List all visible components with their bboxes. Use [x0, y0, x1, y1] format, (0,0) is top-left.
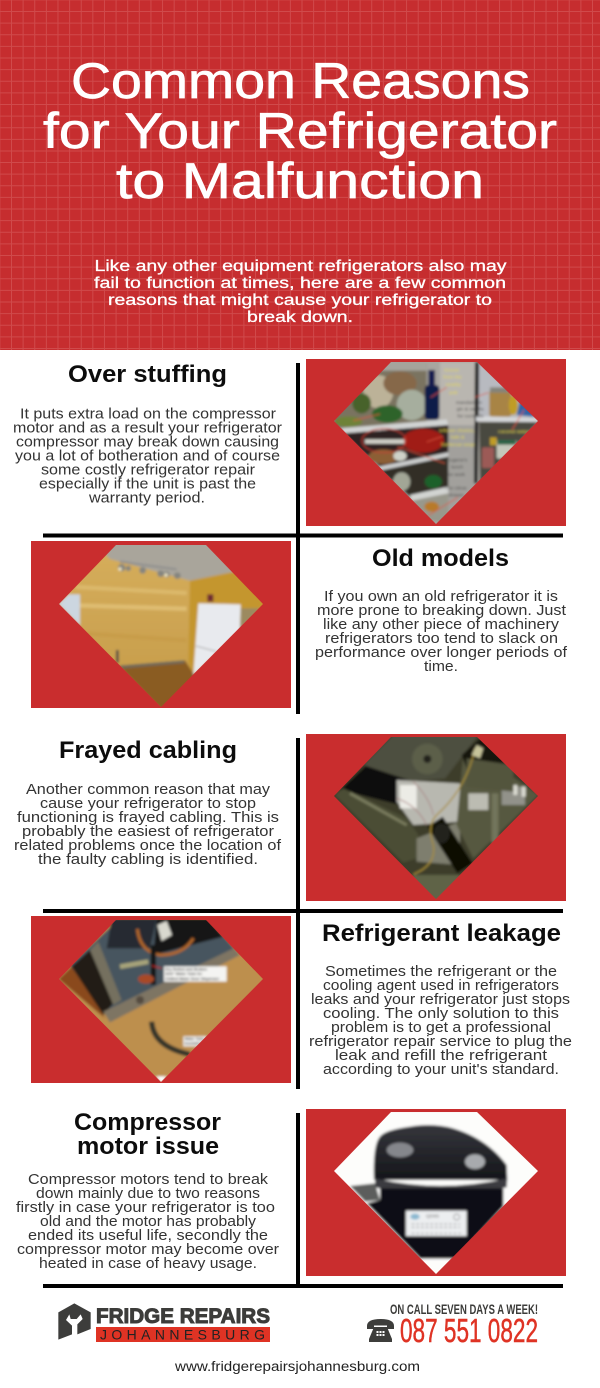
- section 3 body text: probably the easiest of refrigerator: [22, 824, 274, 840]
- section 5 body text: compressor motor may become over: [17, 1242, 279, 1258]
- section 2 heading: Old models: Old models: [372, 545, 509, 572]
- intro text: Like any other equipment refrigerators also may: [94, 258, 507, 275]
- photo panel: overstuffed fridge interior: kale &: [451, 435, 465, 441]
- photo panel: frayed wires: [306, 734, 566, 902]
- section 1 body text: you a lot of botheration and of course: [15, 449, 280, 465]
- section 5 body text: down mainly due to two reasons: [36, 1186, 260, 1202]
- section 5 body text: [16, 1172, 279, 1272]
- icon: house with wrench: [58, 1303, 91, 1340]
- photo panel: compressor motor: QD65: [426, 1213, 439, 1219]
- photo panel: leaking water tube: Water Tube: [185, 1037, 204, 1041]
- photo panel: overstuffed fridge interior: [306, 359, 566, 527]
- title: to Malfunction: [116, 153, 484, 209]
- photo panel: overstuffed fridge interior: gin & vanilla: [457, 407, 484, 413]
- title: for Your Refrigerator: [43, 103, 557, 159]
- section 2 body text: refrigerators too tend to slack on: [325, 631, 558, 647]
- intro text: reasons that might cause your refrigerator to: [108, 292, 492, 309]
- section 3 body text: functioning is frayed cabling. This is: [17, 810, 279, 826]
- section 1 body text: [13, 407, 282, 507]
- photo panel: compressor motor: [306, 1109, 566, 1277]
- section 1 body text: especially if the unit is past the: [39, 477, 256, 493]
- section 5 body text: old and the motor has probably: [40, 1214, 257, 1230]
- section 2 body text: more prone to breaking down. Just: [317, 603, 566, 619]
- logo: Fridge Repairs Johannesburg: FRIDGE REPAIRS: [96, 1305, 270, 1328]
- photo panel: leaking water tube: Chilled Water Door Dispenser: [165, 977, 220, 981]
- section 2 body text: time.: [424, 659, 458, 675]
- photo panel: overstuffed fridge interior: mandarin in: [456, 400, 482, 406]
- section 3 heading: Frayed cabling: Frayed cabling: [59, 737, 237, 764]
- section 3 body text: cause your refrigerator to stop: [40, 796, 256, 812]
- section 4 body text: cooling agent used in refrigerators: [323, 978, 559, 994]
- section 5 heading: Compressor motor issue: [74, 1109, 221, 1160]
- section 2 body text: [315, 589, 568, 675]
- photo panel: leaking water tube: Dry Rotted and Broken: [165, 967, 208, 971]
- section 4 body text: refrigerator repair service to plug the: [309, 1034, 572, 1050]
- section 4 body text: [309, 964, 572, 1078]
- photo panel: leaking water tube: Insulation: [185, 1041, 202, 1045]
- section 4 body text: problem is to get a professional: [331, 1020, 551, 1036]
- photo panel: overstuffed fridge interior: nearby: [446, 382, 461, 388]
- contact phone block: ON CALL SEVEN DAYS A WEEK!: [390, 1302, 538, 1317]
- section 1 body text: It puts extra load on the compressor: [20, 407, 276, 423]
- section 5 body text: firstly in case your refrigerator is too: [16, 1200, 275, 1216]
- logo: Fridge Repairs Johannesburg: [58, 1303, 270, 1342]
- website url: www.fridgerepairsjohannesburg.com: [174, 1359, 420, 1374]
- intro text: fail to function at times, here are a few common: [94, 275, 506, 292]
- icon: telephone: [367, 1319, 394, 1342]
- section 3 body text: the faulty cabling is identified.: [38, 852, 258, 868]
- section 4 heading: Refrigerant leakage: Refrigerant leakage: [322, 920, 561, 947]
- section 4 body text: leaks and your refrigerator just stops: [311, 992, 570, 1008]
- section 5 body text: Compressor motors tend to break: [28, 1172, 269, 1188]
- intro text: break down.: [247, 309, 353, 326]
- section 1 heading: Over stuffing: Over stuffing: [68, 361, 227, 388]
- title: Common Reasons: [71, 53, 530, 109]
- intro text: [94, 258, 507, 326]
- section 1 body text: compressor may break down causing: [16, 435, 279, 451]
- section 4 body text: according to your unit's standard.: [323, 1062, 559, 1078]
- photo panel: overstuffed fridge interior: barbecue soup: [441, 442, 475, 448]
- section 1 body text: warranty period.: [88, 491, 205, 507]
- photo panel: overstuffed fridge interior: drawer: [449, 493, 464, 499]
- photo panel: overstuffed fridge interior: for cocktails: [457, 413, 484, 419]
- section 4 body text: cooling. The only solution to this: [323, 1006, 559, 1022]
- section 3 body text: related problems once the location of: [14, 838, 282, 854]
- section 1 body text: motor and as a result your refrigerator: [13, 421, 282, 437]
- title: [43, 53, 557, 209]
- photo panel: leaking water tube: [31, 915, 291, 1085]
- section 5 body text: heated in case of heavy usage.: [39, 1256, 257, 1272]
- photo panel: overstuffed fridge interior: coconut water: [498, 429, 529, 435]
- header background panel: [0, 0, 600, 350]
- section 4 body text: Sometimes the refrigerant or the: [325, 964, 557, 980]
- logo: Fridge Repairs Johannesburg: JOHANNESBURG: [100, 1326, 265, 1342]
- section 4 body text: leak and refill the refrigerant: [335, 1048, 547, 1064]
- section 1 body text: some costly refrigerator repair: [41, 463, 255, 479]
- photo panel: overstuffed fridge interior: for work: [447, 472, 466, 478]
- photo panel: overstuffed fridge interior: lunch: [451, 464, 463, 470]
- photo panel: overstuffed fridge interior: Eugene's: [447, 457, 468, 463]
- section 3 body text: [14, 782, 282, 868]
- photo panel: overstuffed fridge interior: Grocer: [444, 367, 460, 373]
- photo panel: overstuffed fridge interior: pub: [449, 390, 458, 396]
- section 2 body text: If you own an old refrigerator it is: [324, 589, 558, 605]
- photo panel: overstuffed fridge interior: from the: [443, 375, 462, 381]
- section 2 body text: like any other piece of machinery: [323, 617, 560, 633]
- section 3 body text: Another common reason that may: [26, 782, 271, 798]
- section 5 heading: Compressor motor issue: Compressor: [74, 1109, 221, 1136]
- section 2 body text: performance over longer periods of: [315, 645, 568, 661]
- section 5 heading: Compressor motor issue: motor issue: [77, 1133, 219, 1160]
- contact phone block: 087 551 0822: [400, 1312, 538, 1349]
- contact phone block: [367, 1302, 538, 1349]
- photo panel: old fridge in wooden room: [31, 541, 291, 712]
- photo panel: overstuffed fridge interior: The citrus: [445, 485, 467, 491]
- section 5 body text: ended its useful life, secondly the: [28, 1228, 268, 1244]
- photo panel: leaking water tube: 3/16" Water Tube for: [165, 972, 203, 976]
- photo panel: overstuffed fridge interior: leftover chorizo,: [439, 428, 475, 434]
